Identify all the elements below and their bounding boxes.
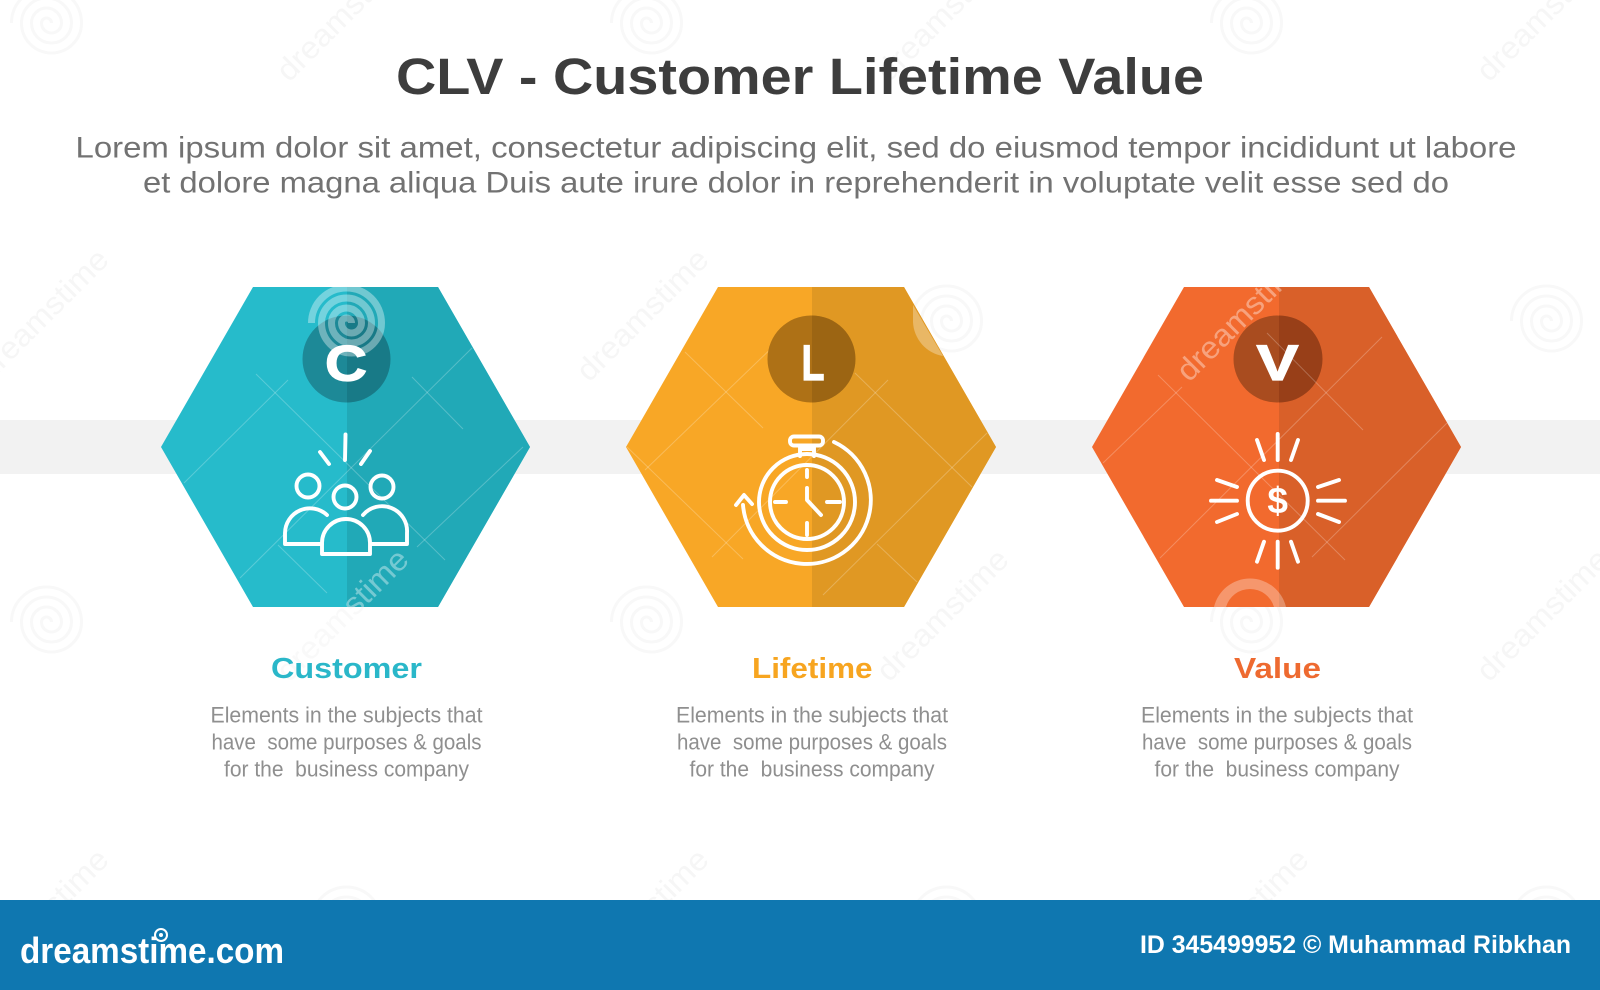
- icon: shining dollar coin: [1211, 434, 1345, 568]
- watermark background pattern: dreamstime: [1169, 842, 1316, 988]
- subtitle text: [76, 132, 1516, 200]
- watermark on value hexagon: dreamstime: [1169, 242, 1316, 388]
- panel: lifetime hexagon: [626, 287, 996, 607]
- text block: lifetime: Lifetime: [752, 653, 872, 685]
- icon: shining dollar coin: $: [1267, 480, 1288, 521]
- letter badge V: [1234, 316, 1363, 430]
- horizontal connector band: [0, 420, 1600, 474]
- text block: customer: [210, 653, 482, 782]
- text block: customer: for the business company: [224, 756, 469, 782]
- footer logo: dreamstime.com: [20, 930, 284, 971]
- text block: customer: Customer: [271, 653, 422, 685]
- text block: value: for the business company: [1154, 756, 1400, 782]
- icon: stopwatch with circular arrow: [736, 436, 871, 564]
- footer credit: ID 345499952 © Muhammad Ribkhan: [1140, 931, 1571, 959]
- footer bar: [0, 900, 1600, 990]
- letter badge C: C: [325, 336, 367, 392]
- text block: lifetime: for the business company: [690, 756, 934, 782]
- text block: lifetime: [676, 653, 948, 782]
- watermark background pattern: dreamstime: [269, 542, 416, 688]
- text block: value: Elements in the subjects that: [1141, 702, 1413, 728]
- panel: customer hexagon: [161, 287, 530, 688]
- subtitle text: et dolore magna aliqua Duis aute irure dolor in reprehenderit in voluptate velit esse sed do: [143, 166, 1449, 200]
- letter badge L: L: [802, 335, 824, 391]
- text block: customer: Elements in the subjects that: [210, 702, 482, 728]
- watermark on value hexagon: [1169, 242, 1316, 607]
- text block: value: [1141, 653, 1413, 782]
- letter badge C: [302, 288, 390, 402]
- text block: value: Value: [1234, 653, 1321, 685]
- watermark background pattern: dreamstime: [569, 242, 716, 388]
- watermark background pattern: dreamstime: [569, 842, 716, 988]
- title: CLV - Customer Lifetime Value: [396, 48, 1204, 105]
- text block: lifetime: have some purposes & goals: [677, 730, 947, 754]
- letter badge L: [768, 316, 856, 402]
- text block: lifetime: Elements in the subjects that: [676, 702, 948, 728]
- watermark on customer hexagon: dreamstime: [269, 542, 416, 688]
- text block: value: have some purposes & goals: [1142, 730, 1412, 754]
- icon: customer group: [285, 434, 407, 554]
- panel: value hexagon: [1092, 242, 1461, 607]
- watermark background pattern: dreamstime: [869, 542, 1016, 688]
- letter badge V: V: [1256, 335, 1299, 391]
- text block: customer: have some purposes & goals: [212, 730, 482, 754]
- subtitle text: Lorem ipsum dolor sit amet, consectetur adipiscing elit, sed do eiusmod tempor incididunt ut labore: [76, 132, 1516, 164]
